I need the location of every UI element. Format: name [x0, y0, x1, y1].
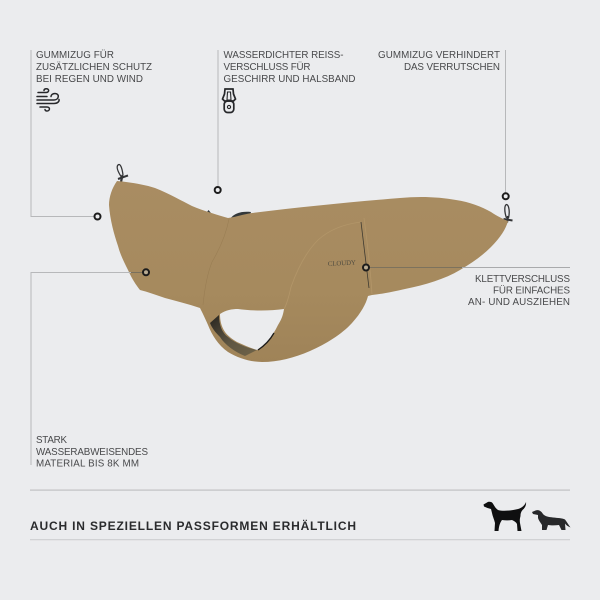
callout: waterproof zipper: GESCHIRR UND HALSBAND — [224, 74, 356, 85]
seam: flap right — [364, 218, 372, 294]
footer rule: bottom — [30, 538, 570, 541]
callout: waterproof zipper — [215, 50, 356, 193]
seam: strap flap — [284, 222, 361, 309]
icon: zipper — [222, 89, 236, 112]
callout: elastic cord protection: GUMMIZUG FÜR — [36, 50, 114, 61]
callout: velcro closure: FÜR EINFACHES — [493, 286, 570, 296]
footer rule: top — [30, 490, 570, 491]
heading: special fits: AUCH IN SPEZIELLEN PASSFORMEN ERHÄLTLICH — [30, 518, 356, 533]
callout: velcro closure: KLETTVERSCHLUSS — [475, 274, 570, 285]
callout: velcro closure: AN- UND AUSZIEHEN — [468, 297, 570, 308]
callout: water-repellent material — [31, 269, 149, 470]
callout: velcro closure — [363, 264, 570, 308]
lining edge — [258, 333, 274, 350]
coat body — [109, 181, 508, 362]
callout: elastic cord protection — [31, 50, 152, 220]
callout: waterproof zipper: VERSCHLUSS FÜR — [224, 62, 310, 73]
logo: CLOUDY — [328, 260, 356, 268]
drawstring: tail — [504, 204, 512, 222]
seam: shoulder — [203, 219, 229, 305]
callout: elastic cord protection: ZUSÄTZLICHEN SCHUTZ — [36, 62, 152, 73]
zipper tab — [230, 212, 251, 219]
callout: elastic cord protection: BEI REGEN UND WIND — [36, 74, 143, 85]
icon: large dog — [484, 502, 526, 531]
callout: water-repellent material: STARK — [36, 435, 67, 446]
lining — [210, 315, 257, 356]
velcro edge — [361, 222, 369, 288]
callout: elastic prevents slipping — [378, 50, 509, 199]
callout: water-repellent material: MATERIAL BIS 8K MM — [36, 458, 139, 470]
icon: wind — [37, 89, 59, 111]
drawstring: neck — [117, 164, 128, 182]
coat product image — [109, 164, 512, 362]
callout: water-repellent material: WASSERABWEISENDES — [36, 447, 148, 458]
callout: waterproof zipper: WASSERDICHTER REISS- — [224, 50, 344, 61]
icon: dachshund — [532, 510, 570, 530]
callout: elastic prevents slipping: DAS VERRUTSCHEN — [404, 62, 500, 73]
callout: elastic prevents slipping: GUMMIZUG VERHINDERT — [378, 50, 500, 61]
